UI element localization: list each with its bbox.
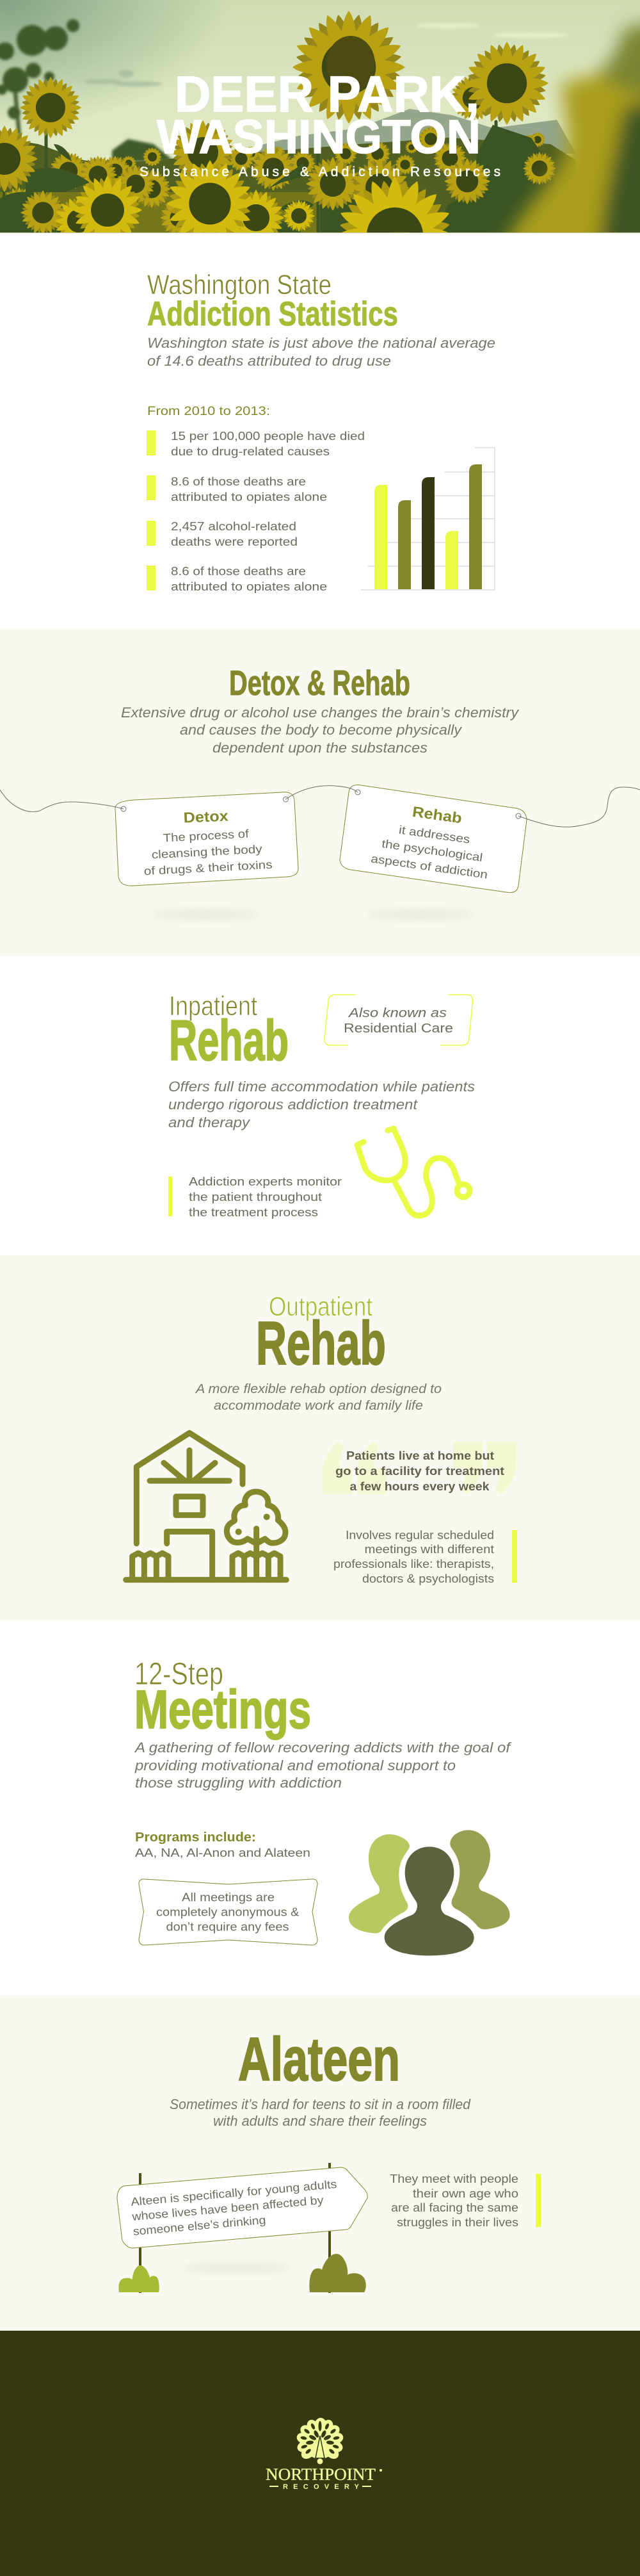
heading: Inpatient Rehab: Inpatient [169,991,257,1022]
note: scheduled meetings: professionals like: therapists, [333,1558,494,1570]
field ground [0,138,576,233]
panel: statistics [0,233,640,629]
note: scheduled meetings: Involves regular scheduled [346,1529,494,1542]
callout: anonymous: completely anonymous & [156,1906,300,1919]
note: own age: They meet with people [390,2172,518,2185]
bar chart [361,448,495,590]
heading: Inpatient Rehab: Rehab [169,1008,289,1072]
card: Detox [115,792,298,886]
programs list: AA, NA, Al-Anon and Alateen [135,1846,310,1859]
intro text: of 14.6 deaths attributed to drug use [147,353,391,369]
mountains [256,109,576,154]
stat 3: 2,457 alcohol-related [171,520,296,533]
background tree [0,19,173,163]
heading: Detox & Rehab: Detox & Rehab [229,663,410,703]
hero title: WASHINGTON [157,110,481,163]
callout: residential care: Also known as [348,1006,447,1020]
card: Rehab: aspects of addiction [370,852,488,881]
stat 1: due to drug-related causes [171,445,330,458]
icon: right bush [309,2254,366,2292]
panel: alateen [0,1995,640,2331]
leaves and stems [0,125,557,233]
card: Rehab [340,785,527,893]
stat 4 [147,565,327,593]
heading: Washington State Addiction Statistics: Addiction Statistics [147,295,398,333]
panel: detox and rehab [0,629,640,956]
large sunflowers [0,4,558,301]
icon: left bush [118,2265,159,2292]
card shadows [152,910,475,919]
hero panel [0,0,640,301]
heading: Outpatient Rehab [256,1291,386,1378]
note: addiction experts: the patient throughout [189,1191,322,1203]
hanging string [0,786,640,827]
stat 2: attributed to opiates alone [171,491,327,503]
date subheading: From 2010 to 2013: [147,405,270,418]
tagline: RECOVERY [283,2483,360,2491]
note: addiction experts: Addiction experts monitor [189,1175,342,1188]
intro text: Sometimes it’s hard for teens to sit in a room filled [170,2096,471,2112]
stat 1: 15 per 100,000 people have died [171,430,365,443]
icon: three people [349,1830,510,1955]
stat 2: 8.6 of those deaths are [171,475,306,488]
quote: patients live at home [323,1442,516,1494]
card: Detox: cleansing the body [151,842,262,861]
card: Rehab: it addresses [398,823,471,846]
note: own age: their own age who [413,2187,518,2200]
intro text: Extensive drug or alcohol use changes the brain’s chemistry [121,705,520,721]
programs list [135,1830,310,1859]
intro text: dependent upon the substances [212,740,428,756]
intro text: and therapy [168,1114,251,1130]
note: addiction experts [168,1175,342,1219]
panel: inpatient rehab [0,956,640,1255]
panel: 12-step meetings [0,1620,640,1995]
hero title [157,65,481,163]
intro text [195,1382,442,1413]
signpost [117,2163,367,2293]
wordmark: NORTHPOINT [266,2465,376,2484]
stat 2 [147,475,327,503]
stat 4: 8.6 of those deaths are [171,565,306,578]
signpost: Alteen is specifically for young adults [131,2178,337,2208]
blurred foreground flower [499,19,640,256]
intro text: A more flexible rehab option designed to [195,1382,442,1396]
stat 3 [147,520,298,548]
note: scheduled meetings: doctors & psychologists [362,1572,494,1585]
card: Detox: of drugs & their toxins [143,858,273,877]
signpost: someone else’s drinking [132,2213,266,2238]
intro text: and causes the body to become physically [180,722,463,738]
heading: Washington State Addiction Statistics: Washington State [147,270,332,300]
heading: 12-Step Meetings [134,1657,311,1740]
heading: 12-Step Meetings: Meetings [134,1679,311,1740]
intro text: those struggling with addiction [135,1775,342,1791]
registered mark [380,2469,382,2472]
callout: residential care [324,995,473,1045]
card: Detox: Detox [183,807,228,826]
panel: footer [0,2331,640,2576]
intro text: Washington state is just above the national average [147,335,495,351]
heading: Outpatient Rehab: Outpatient [269,1291,372,1321]
note: own age: struggles in their lives [397,2216,518,2229]
note: own age: are all facing the same [391,2201,518,2214]
intro text [147,335,495,369]
note: scheduled meetings: meetings with different [365,1543,494,1556]
intro text: undergo rigorous addiction treatment [168,1096,418,1113]
callout: residential care: Residential Care [344,1022,453,1036]
callout: anonymous [139,1879,317,1945]
card: Rehab: the psychological [381,837,483,864]
stat 1 [147,430,365,458]
hero title: DEER PARK, [175,65,479,122]
callout: anonymous: All meetings are [182,1891,275,1903]
intro text [134,1740,512,1791]
quote: patients live at home: a few hours every week [349,1480,490,1493]
heading: Washington State Addiction Statistics [147,270,398,333]
intro text: providing motivational and emotional support to [134,1757,456,1773]
programs list: Programs include: [135,1830,256,1845]
signpost: whose lives have been affected by [131,2194,324,2223]
logo mark: peacock fan [296,2418,344,2465]
note: addiction experts: the treatment process [189,1206,318,1219]
intro text [121,705,520,756]
intro text: Offers full time accommodation while patients [168,1079,475,1095]
intro text: A gathering of fellow recovering addicts with the goal of [134,1740,512,1756]
hero subtitle: Substance Abuse & Addiction Resources [140,165,500,179]
ground shadow [182,2263,291,2272]
heading: 12-Step Meetings: 12-Step [134,1657,223,1692]
note: own age [390,2172,541,2229]
icon: stethoscope [357,1129,470,1216]
heading: Inpatient Rehab [169,991,289,1072]
small sunflowers [0,117,546,239]
panel: outpatient rehab [0,1255,640,1620]
card: Rehab: Rehab [412,803,463,826]
icon: house and tree [126,1433,286,1580]
quote: patients live at home: go to a facility for treatment [335,1465,504,1478]
hero photo: sunflower field [0,0,640,301]
stat 3: deaths were reported [171,535,298,548]
callout: anonymous: don’t require any fees [166,1920,289,1933]
stat 4: attributed to opiates alone [171,580,327,593]
intro text: with adults and share their feelings [213,2113,427,2129]
note: scheduled meetings [333,1529,517,1585]
card: Detox: The process of [163,827,250,845]
intro text [168,1079,475,1130]
intro text: accommodate work and family life [214,1398,423,1413]
intro text [170,2096,471,2129]
logo: Northpoint Recovery [266,2418,382,2491]
heading: Outpatient Rehab: Rehab [256,1309,386,1378]
quote: patients live at home: Patients live at home but [346,1449,494,1462]
heading: Alateen: Alateen [238,2025,400,2094]
